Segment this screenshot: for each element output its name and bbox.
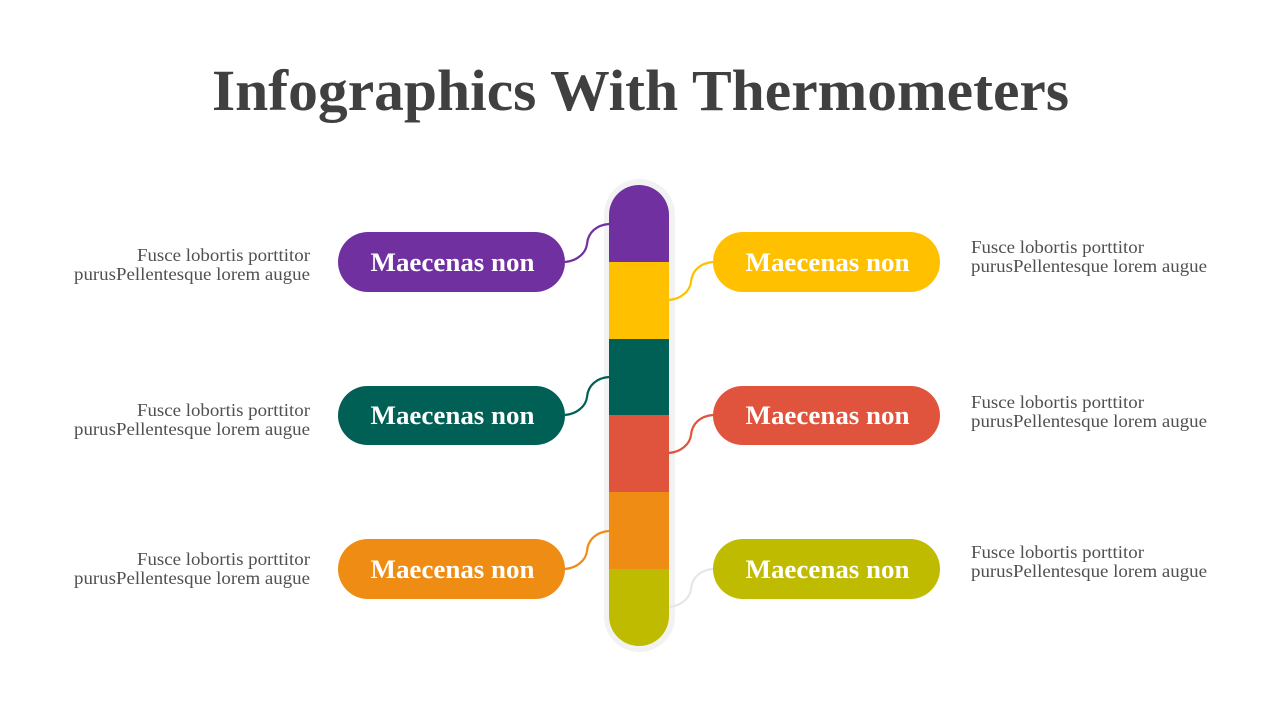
text block: bottom right: Fusce lobortis porttitor: [971, 542, 1144, 562]
pill: yellow: [713, 232, 940, 292]
pill: orange: Maecenas non: [370, 554, 535, 584]
text block: top right: [971, 237, 1207, 276]
thermometer outer casing: [604, 179, 675, 652]
text block: top left: purusPellentesque lorem augue: [74, 264, 310, 284]
pill: purple: Maecenas non: [370, 247, 535, 277]
text block: top left: Fusce lobortis porttitor: [137, 245, 310, 265]
text block: middle left: Fusce lobortis porttitor: [137, 400, 310, 420]
connector: green: [565, 377, 609, 415]
connector: yellow: [669, 262, 713, 300]
title: Infographics With Thermometers: [212, 58, 1069, 123]
text block: middle right: purusPellentesque lorem augue: [971, 411, 1207, 431]
text block: top left: [74, 245, 310, 284]
segment: olive: [609, 569, 669, 646]
segment: orange: [609, 492, 669, 569]
segment: red: [609, 415, 669, 492]
text block: bottom right: purusPellentesque lorem augue: [971, 561, 1207, 581]
pill: green: [338, 386, 565, 445]
text block: bottom right: [971, 542, 1207, 581]
pill: yellow: Maecenas non: [746, 247, 910, 277]
text block: middle right: Fusce lobortis porttitor: [971, 392, 1144, 412]
pill: olive: Maecenas non: [746, 554, 910, 584]
text block: middle left: purusPellentesque lorem augue: [74, 419, 310, 439]
thermometer: [604, 179, 675, 652]
connector: red: [669, 415, 713, 453]
text block: middle right: [971, 392, 1207, 431]
pill: orange: [338, 539, 565, 599]
text block: bottom left: purusPellentesque lorem augue: [74, 568, 310, 588]
text block: top right: purusPellentesque lorem augue: [971, 256, 1207, 276]
segment: yellow: [609, 262, 669, 339]
pill: red: Maecenas non: [746, 400, 910, 430]
pill: purple: [338, 232, 565, 292]
segment: purple: [609, 185, 669, 262]
pill: red: [713, 386, 940, 445]
connector: grey: [669, 569, 713, 607]
text block: bottom left: Fusce lobortis porttitor: [137, 549, 310, 569]
text block: top right: Fusce lobortis porttitor: [971, 237, 1144, 257]
connector: purple: [565, 224, 609, 262]
pill: olive: [713, 539, 940, 599]
segment: green: [609, 339, 669, 415]
text block: middle left: [74, 400, 310, 439]
text block: bottom left: [74, 549, 310, 588]
connector: orange: [565, 531, 609, 569]
pill: green: Maecenas non: [370, 400, 535, 430]
